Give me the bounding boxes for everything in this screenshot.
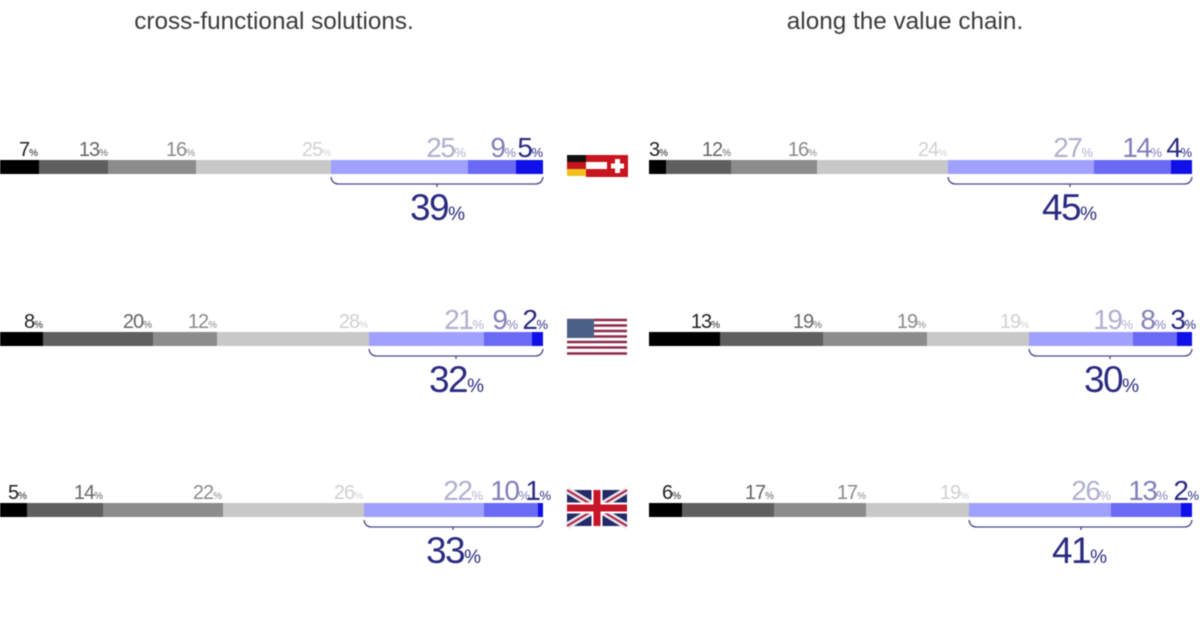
chart: right column, USA: 19% <box>1093 304 1133 335</box>
chart: right column, USA: 13% <box>691 311 720 333</box>
chart: right column, UK: 2% <box>1173 475 1199 506</box>
chart: left column, UK: 26% <box>334 482 363 504</box>
chart: left column, USA: 28% <box>339 311 368 333</box>
chart: right column, UK: 6% <box>662 482 681 504</box>
chart: right column, UK <box>649 475 1199 571</box>
chart: left column, USA: 8% <box>24 311 43 333</box>
chart: left column, USA: 2% <box>522 304 548 335</box>
chart: left column, Germany Austria Switzerland: 39% <box>410 187 465 228</box>
chart: right column, USA: 19% <box>793 311 822 333</box>
chart: right column, USA: 8% <box>1140 304 1166 335</box>
chart: right column, Germany Austria Switzerland <box>649 132 1192 228</box>
heading: right column: along the value chain. <box>787 8 1023 35</box>
chart: right column, Germany Austria Switzerland: 4% <box>1166 132 1192 163</box>
chart: left column, UK <box>0 475 551 571</box>
chart: left column, Germany Austria Switzerland: 25% <box>426 132 466 163</box>
chart: right column, Germany Austria Switzerland: 16% <box>788 139 817 161</box>
chart: left column, Germany Austria Switzerland: 9% <box>490 132 516 163</box>
chart: left column, USA: 20% <box>123 311 152 333</box>
chart: left column, UK: 22% <box>443 475 483 506</box>
chart: right column, UK: 17% <box>745 482 774 504</box>
chart: left column, UK: 10% <box>490 475 530 506</box>
chart: right column, USA: 19% <box>897 311 926 333</box>
chart: left column, USA: 32% <box>429 359 484 400</box>
chart: right column, USA: 30% <box>1084 359 1139 400</box>
icon: UK flag <box>567 490 627 526</box>
chart: left column, UK: 22% <box>193 482 222 504</box>
icon: Germany Austria Switzerland flags <box>567 155 628 177</box>
chart: left column, UK: 5% <box>8 482 27 504</box>
chart: left column, USA: 21% <box>444 304 484 335</box>
chart: left column, USA <box>0 304 548 400</box>
chart: right column, Germany Austria Switzerland: 14% <box>1122 132 1162 163</box>
chart: left column, UK: 1% <box>525 475 551 506</box>
icon: USA flag <box>567 319 627 355</box>
chart: left column, Germany Austria Switzerland: 7% <box>19 139 38 161</box>
chart: right column, USA: 3% <box>1170 304 1196 335</box>
chart: right column, Germany Austria Switzerland: 27% <box>1053 132 1093 163</box>
chart: right column, Germany Austria Switzerland: 12% <box>702 139 731 161</box>
chart: right column, USA <box>649 304 1196 400</box>
chart: left column, Germany Austria Switzerland: 25% <box>302 139 331 161</box>
chart: right column, UK: 17% <box>837 482 866 504</box>
chart: right column, Germany Austria Switzerland: 45% <box>1042 187 1097 228</box>
chart: right column, USA: 19% <box>1000 311 1029 333</box>
chart: right column, UK: 26% <box>1071 475 1111 506</box>
chart: left column, Germany Austria Switzerland: 5% <box>517 132 543 163</box>
chart: left column, Germany Austria Switzerland <box>0 132 543 228</box>
chart: left column, UK: 33% <box>426 530 481 571</box>
heading: left column: cross-functional solutions. <box>134 8 414 35</box>
chart: left column, UK: 14% <box>74 482 103 504</box>
chart: left column, USA: 12% <box>188 311 217 333</box>
chart: right column, UK: 41% <box>1052 530 1107 571</box>
chart: right column, UK: 19% <box>940 482 969 504</box>
chart: right column, Germany Austria Switzerland: 24% <box>918 139 947 161</box>
chart: right column, Germany Austria Switzerland: 3% <box>649 139 668 161</box>
chart: left column, Germany Austria Switzerland: 16% <box>166 139 195 161</box>
chart: left column, Germany Austria Switzerland: 13% <box>79 139 108 161</box>
chart: left column, USA: 9% <box>492 304 518 335</box>
chart: right column, UK: 13% <box>1128 475 1168 506</box>
